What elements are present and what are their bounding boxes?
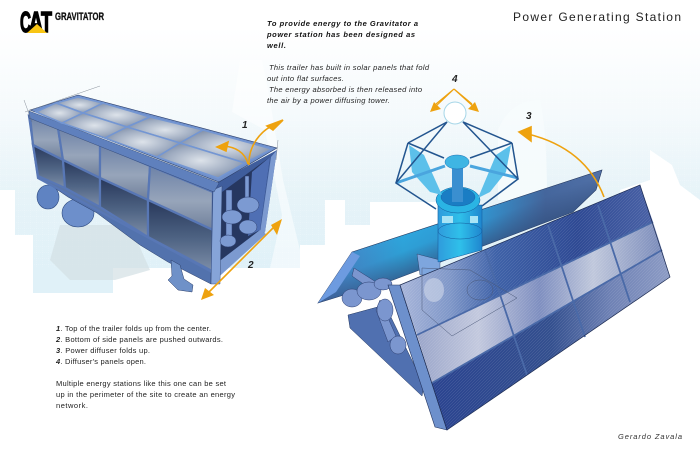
pistons: [342, 268, 406, 354]
intro text: [266, 19, 430, 105]
intro text: The energy absorbed is then released into: [269, 85, 422, 94]
tower pole: [452, 166, 463, 202]
power diffusing tower: [396, 102, 518, 262]
trailer leg: [168, 260, 193, 292]
intro text: the air by a power diffusing tower.: [267, 96, 390, 105]
steps and note: up in the perimeter of the site to create an energy: [56, 390, 235, 399]
GRAVITATOR wordmark: GRAVITATOR: [55, 11, 104, 23]
intro text: power station has been designed as: [266, 30, 415, 39]
tower column: [438, 205, 482, 262]
trailer chassis: [40, 178, 211, 284]
tower ring: [436, 187, 480, 213]
intro text: out into flat surfaces.: [267, 74, 344, 83]
background skyline: [0, 28, 700, 293]
intro text: To provide energy to the Gravitator a: [267, 19, 418, 28]
trailer wheels: [37, 185, 94, 227]
trailer: [24, 86, 278, 292]
title: Power Generating Station: [513, 10, 681, 24]
hub spokes: [396, 166, 518, 183]
diffuser vanes: [409, 145, 442, 195]
steps and note: Multiple energy stations like this one can be set: [56, 379, 227, 388]
trailer roof: [30, 95, 277, 182]
CAT wordmark: C: [20, 7, 31, 39]
steps and note: [55, 324, 235, 410]
trailer pistons: [220, 176, 259, 247]
central box: [417, 254, 440, 275]
back solar panel: [318, 170, 602, 396]
steps and note: 3. Power diffuser folds up.: [56, 346, 150, 355]
step numbers: [242, 74, 532, 271]
top ring: [444, 102, 466, 124]
steps and note: 2. Bottom of side panels are pushed outwards.: [55, 335, 223, 344]
trailer roof fascia: [29, 111, 219, 192]
steps and note: network.: [56, 401, 88, 410]
steps and note: 1. Top of the trailer folds up from the center.: [56, 324, 211, 333]
diffuser frame: [396, 122, 518, 209]
step numbers: 1: [242, 120, 248, 131]
letter A: A: [29, 7, 43, 39]
arrow 4: [430, 89, 479, 112]
hub: [445, 155, 469, 169]
yellow triangle: [27, 24, 47, 33]
intro text: This trailer has built in solar panels that fold: [269, 63, 430, 72]
tower sketch lines: [422, 268, 517, 336]
base box: [348, 305, 424, 396]
trailer side panels: [29, 116, 214, 272]
letter T: T: [41, 7, 52, 39]
step numbers: 4: [451, 74, 458, 85]
arrow 3: [519, 127, 604, 197]
credit: Gerardo Zavala: [618, 432, 682, 441]
big solar panel: [388, 185, 670, 430]
step numbers: 3: [526, 111, 532, 122]
arrow 1: [217, 120, 283, 165]
trailer end opening: [211, 150, 277, 284]
steps and note: 4. Diffuser's panels open.: [55, 357, 146, 366]
logo: [20, 7, 104, 39]
intro text: well.: [267, 41, 286, 50]
arrow 2: [201, 219, 282, 300]
step numbers: 2: [247, 260, 254, 271]
